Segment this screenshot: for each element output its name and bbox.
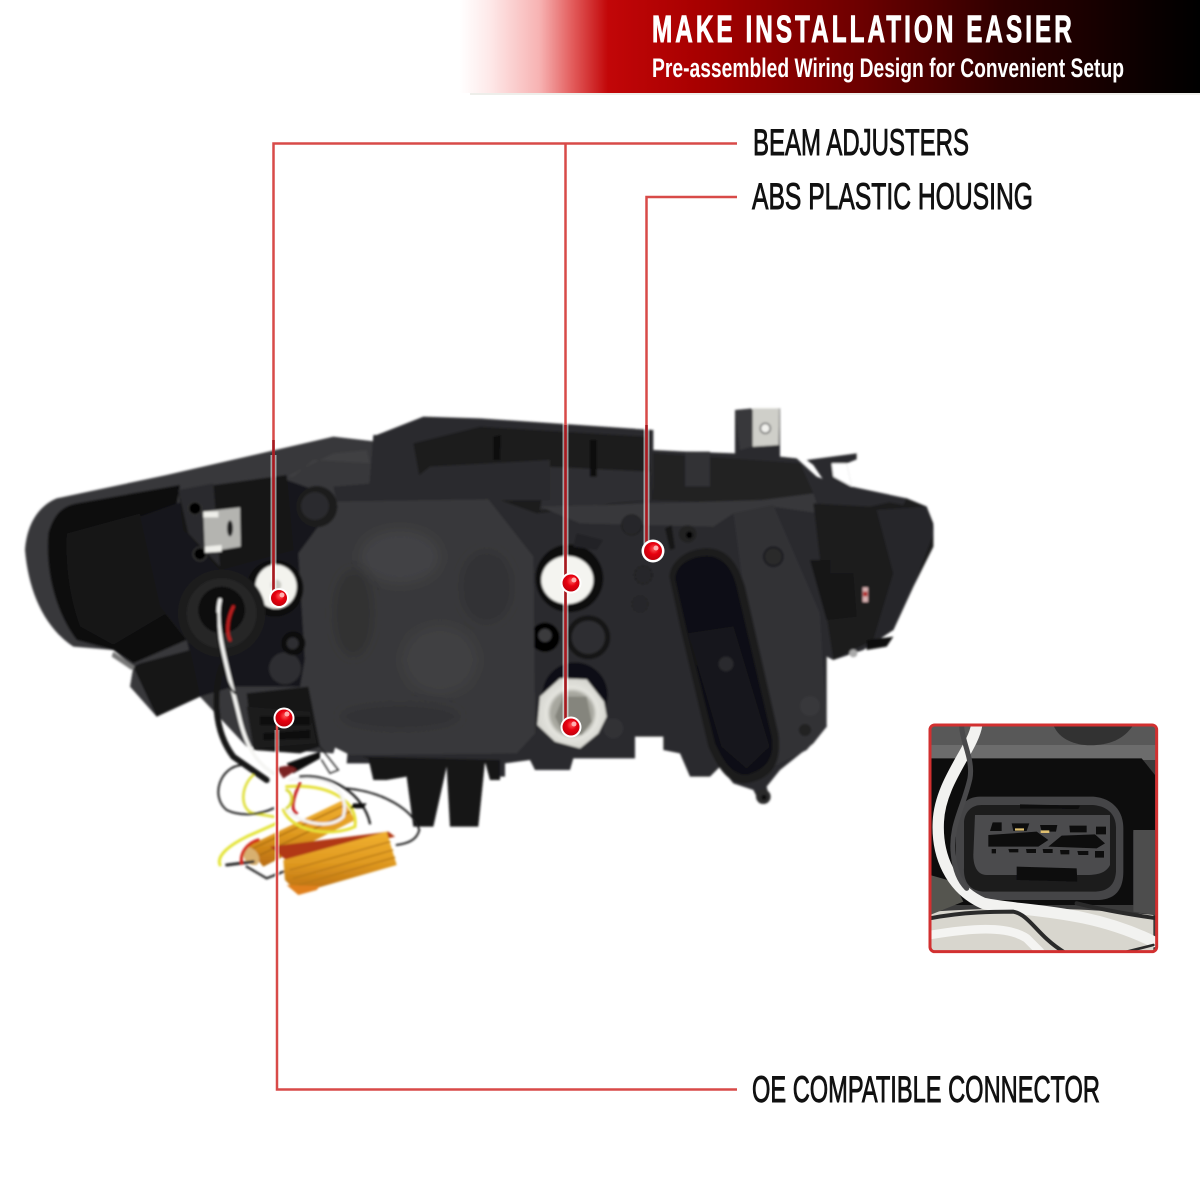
marker: beam adjuster lower — [560, 716, 582, 738]
leader line: OE compatible connector — [277, 720, 737, 1090]
lower right clip — [867, 637, 893, 650]
leader line: beam adjusters — [274, 144, 737, 725]
label: ABS plastic housing: ABS PLASTIC HOUSING — [752, 176, 1033, 217]
bottom tabs — [362, 757, 500, 827]
lens cover — [178, 460, 550, 827]
grommet — [178, 569, 266, 657]
slot recess — [669, 548, 779, 783]
banner title: MAKE INSTALLATION EASIER — [652, 7, 1072, 50]
right clip — [807, 453, 907, 505]
inset: connector close-up — [930, 725, 1157, 952]
headlight photo — [25, 408, 933, 895]
upper adjuster — [535, 544, 603, 612]
upper left adjuster — [247, 560, 303, 617]
marker: beam adjuster left — [269, 588, 289, 608]
label: beam adjusters: BEAM ADJUSTERS — [753, 122, 969, 163]
banner — [460, 0, 1200, 95]
top plug — [296, 486, 337, 527]
connector shell — [956, 797, 1123, 900]
bracket with clip — [178, 475, 293, 570]
plug and screw — [566, 615, 610, 659]
headlight rear housing — [347, 408, 933, 804]
marker: connector — [274, 708, 294, 728]
gold load resistors and wires — [216, 600, 419, 895]
connector block — [247, 687, 320, 753]
marker: beam adjuster upper — [560, 572, 582, 594]
leader line: ABS plastic housing — [646, 197, 737, 548]
marker: housing — [642, 540, 664, 562]
headlight left lens and rim — [25, 437, 400, 753]
bracket tab — [735, 408, 752, 450]
cap and screw — [269, 652, 301, 684]
inset red border — [930, 725, 1157, 952]
connector wires — [930, 725, 1157, 952]
lower adjuster — [542, 662, 608, 728]
